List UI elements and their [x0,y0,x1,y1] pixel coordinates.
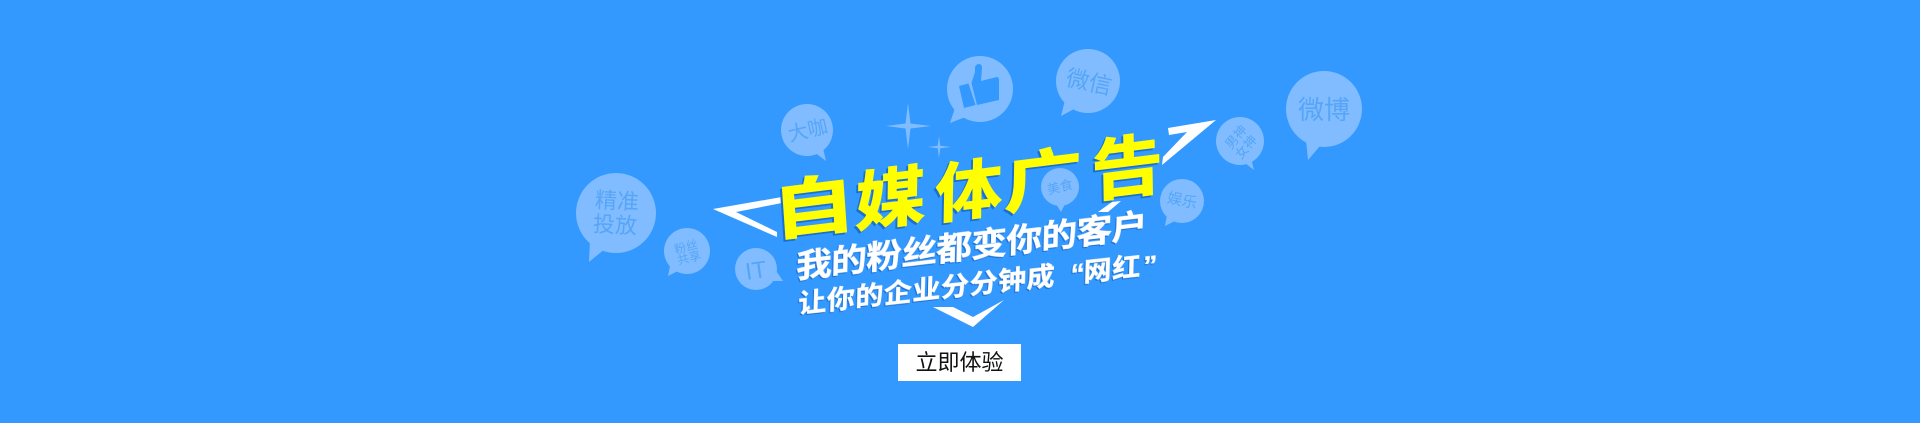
subtitle line two: 让你的企业分分钟成“网红” [798,249,1158,319]
arrow: left chevron [713,197,782,237]
arrow: small accent under title [1098,201,1121,212]
subtitle line one: 我的粉丝都变你的客户 [796,208,1147,286]
title: 媒 [855,160,926,240]
speech bubble: fan sharing: 粉丝 [673,237,699,257]
speech bubble: precise targeting: 投放 [592,211,638,239]
speech bubble: precise targeting [576,173,656,262]
icon: thumbs up [959,64,999,108]
title: 体 [935,151,1003,232]
speech bubble: entertainment [1160,179,1204,226]
icon: large sparkle [886,103,931,149]
call to action button [898,344,1021,381]
title: 自 [770,167,858,249]
speech bubble: IT: IT [744,256,769,286]
speech bubble: gods and goddesses: 男神 [1222,122,1250,152]
speech bubble: fan sharing: 共享 [675,247,702,268]
speech bubble: gods and goddesses [1216,117,1264,170]
speech bubble: thumbs up [947,56,1013,123]
speech bubble: Weibo [1286,71,1362,160]
speech bubble: influencers [781,104,833,161]
icon: small sparkle [928,136,951,158]
speech bubble: Weibo: 微博 [1298,95,1350,125]
speech bubble: gods and goddesses: 女神 [1232,132,1260,162]
speech bubble: WeChat: 微信 [1064,65,1114,99]
call to action button: 立即体验 [915,350,1004,375]
speech bubble: influencers: 大咖 [786,115,830,146]
title [770,126,1163,249]
speech bubble: precise targeting: 精准 [594,187,640,215]
title: 告 [1091,126,1163,210]
title: 广 [1004,141,1082,222]
speech bubble: entertainment: 娱乐 [1166,190,1198,212]
speech bubble: WeChat [1056,49,1120,116]
speech bubble: food [1041,168,1079,212]
speech bubble: food: 美食 [1046,177,1074,197]
arrow: right chevron [1162,120,1216,165]
speech bubble: fan sharing [664,228,710,276]
arrow: bottom chevron [933,300,1004,327]
speech bubble: IT [735,248,783,290]
